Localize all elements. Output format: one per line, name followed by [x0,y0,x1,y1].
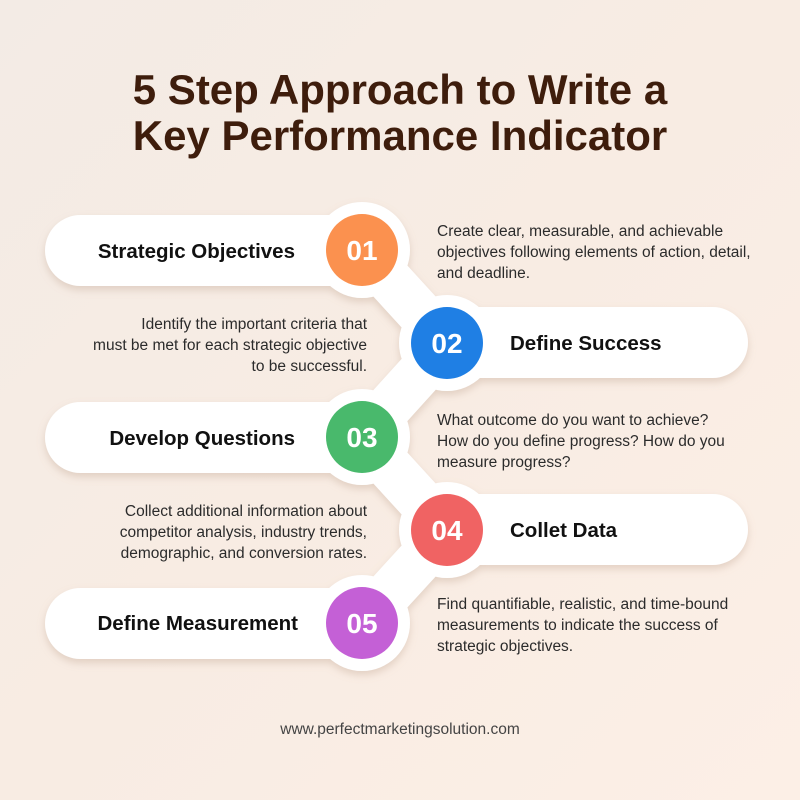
title: 5 Step Approach to Write a [133,66,668,113]
title: Key Performance Indicator [133,112,667,159]
step 05: Find quantifiable, realistic, and time-bound [437,596,728,613]
step 01: and deadline. [437,265,530,282]
step 02: 02 [431,328,463,359]
step 02: to be successful. [252,358,367,375]
step 01: Create clear, measurable, and achievable [437,223,723,240]
step 03: measure progress? [437,454,571,471]
step 01 [98,214,751,286]
step 05: Define Measurement [97,612,298,635]
step 04: Collect additional information about [125,503,368,520]
step 03: 03 [346,422,378,453]
title [133,66,668,159]
step 03 [109,401,725,473]
step 01: 01 [346,235,378,266]
connector spine [45,202,748,671]
step 02 [93,307,662,379]
step 03: Develop Questions [109,427,295,450]
step 02: Define Success [510,332,662,355]
step 03: How do you define progress? How do you [437,433,725,450]
step 04: competitor analysis, industry trends, [120,524,367,541]
step 02: Identify the important criteria that [141,316,368,333]
step 04: demographic, and conversion rates. [121,545,367,562]
footer url: www.perfectmarketingsolution.com [279,721,520,738]
step 01: Strategic Objectives [98,240,295,263]
step 03: What outcome do you want to achieve? [437,412,709,429]
step 01: objectives following elements of action, detail, [437,244,751,261]
step 04: Collet Data [510,519,618,542]
step 05 [97,587,728,659]
step 04 [120,494,618,566]
step 05: measurements to indicate the success of [437,617,719,634]
step 05: strategic objectives. [437,638,573,655]
step 04: 04 [431,515,463,546]
step 05: 05 [346,608,378,639]
step 02: must be met for each strategic objective [93,337,367,354]
